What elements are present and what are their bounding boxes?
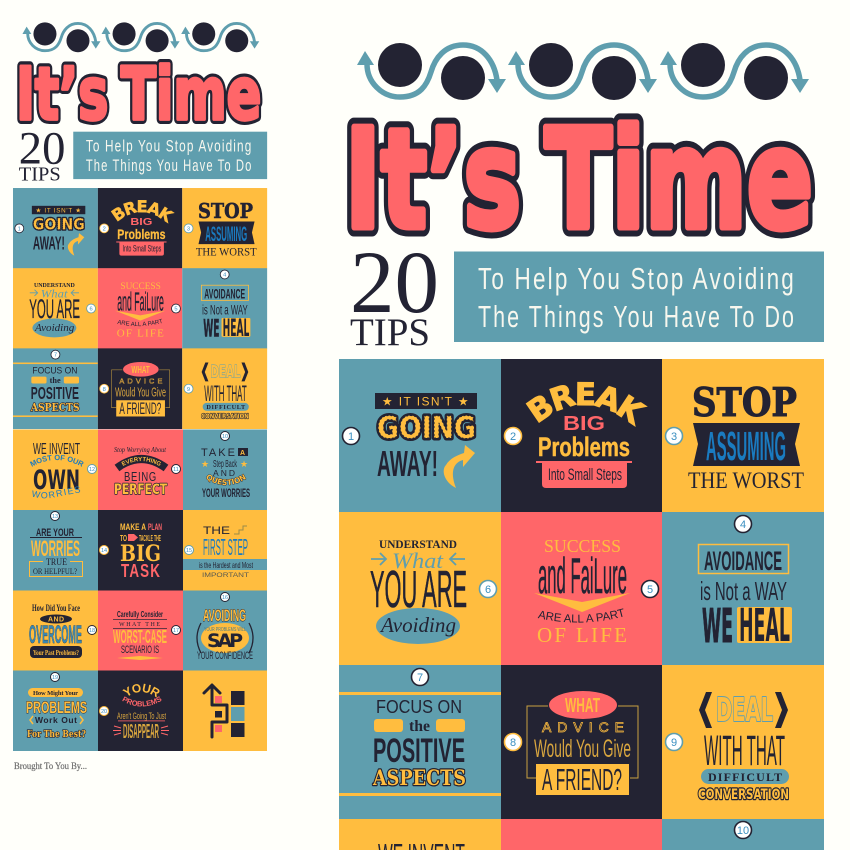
panel: tip 12, cropped <box>339 819 501 850</box>
title: It’s <box>345 101 521 260</box>
panel: tip 20: YOUR <box>122 684 160 698</box>
panel: tip 15 <box>183 510 267 590</box>
panel: tip 15: is the Hardest and Most <box>199 560 253 570</box>
panel: tip 1: GOING <box>377 411 476 446</box>
panel: tip 9: DIFFICULT <box>708 770 782 784</box>
panel: tip 10, cropped: 10 <box>737 825 749 837</box>
panel: tip 9: CONVERSATION <box>698 787 789 803</box>
panel: tip 4: WE <box>203 314 219 342</box>
panel: tip 3 <box>182 188 267 268</box>
panel: tip 6: What <box>41 289 68 301</box>
panel: tip 2: BREAK <box>526 382 648 427</box>
panel: tip 4: 4 <box>740 519 746 531</box>
panel: tip 1 <box>339 359 501 512</box>
panel: tip 4: HEAL <box>223 314 249 342</box>
panel: tip 15: 15 <box>186 548 192 554</box>
panel: tip 17: 17 <box>173 628 179 634</box>
panel: tip 5 <box>98 268 182 348</box>
panel: overview infographic thumbnail <box>13 22 268 772</box>
credit text: Brought To You By... <box>14 761 87 771</box>
panel: tip 8: ADVICE <box>119 376 162 385</box>
panel: tip 9: 9 <box>671 737 677 749</box>
text: FIRST STEP <box>203 534 248 560</box>
panel: tip 7: 7 <box>54 353 57 359</box>
panel: tip 2 <box>501 359 662 512</box>
panel: tip 5: ARE ALL A PART <box>117 318 162 326</box>
panel: tip 4: WE <box>702 599 733 653</box>
panel: tip 16: SAP <box>207 630 243 652</box>
panel: tip 12: WE INVENT <box>33 441 80 458</box>
panel: tip 15: IMPORTANT <box>202 572 249 579</box>
panel: tip 4: 4 <box>223 273 227 279</box>
panel: tip 11: BEING <box>124 469 157 484</box>
panel: tip 16 <box>183 590 267 670</box>
panel: tip 8: WHAT <box>131 365 150 376</box>
title: Time <box>121 52 261 136</box>
panel: tip 3: STOP <box>692 380 797 426</box>
title: It’s <box>345 101 521 260</box>
subtitle banner: The Things You Have To Do <box>86 157 252 175</box>
panel: tip 10: AND <box>213 468 235 478</box>
panel: tip 5: OF LIFE <box>537 623 627 647</box>
panel: tip 1: AWAY! <box>377 443 438 484</box>
panel: tip 6: 6 <box>89 307 93 313</box>
panel: tip 2: Problems <box>538 432 630 462</box>
panel: tip 9 <box>182 348 267 429</box>
panel: tip 8: 8 <box>510 737 516 749</box>
panel: tip 1 <box>13 188 98 268</box>
panel: tip 6: YOU ARE <box>29 293 80 324</box>
panel: tip 10: ★ <box>240 460 248 470</box>
panel: tip 14: PLAN <box>148 522 162 533</box>
subtitle banner: To Help You Stop Avoiding <box>86 137 252 155</box>
panel: tip 6: Avoiding <box>34 322 75 334</box>
panel: tip 11: PERFECT <box>114 482 167 498</box>
panel: tip 12 <box>13 430 98 510</box>
panel: tip 19 <box>13 670 98 751</box>
panel: tip 4 <box>662 512 824 666</box>
panel: tip 20: DISAPPEAR <box>123 721 159 743</box>
heading: 20 tips: TIPS <box>350 311 430 354</box>
panel: tip 7: the <box>409 718 430 735</box>
panel: tip 14 <box>98 510 183 590</box>
panel: tip 3: ASSUMING <box>205 222 247 246</box>
panel: tip 14: 14 <box>101 548 107 554</box>
panel: enlarged detail view <box>339 42 824 850</box>
panel: tip 13: ARE YOUR <box>36 527 74 539</box>
panel: tip 7 <box>13 348 98 429</box>
title: It’s <box>16 52 108 136</box>
panel: tip 1: ★ IT ISN'T ★ <box>36 207 82 214</box>
panel: overview infographic thumbnail: OVERCOME <box>29 621 82 649</box>
panel: tip 14: TO <box>120 534 127 543</box>
panel: tip 1: GOING <box>33 214 85 233</box>
panel: tip 18 <box>13 590 98 670</box>
panel: tip 4: is Not a WAY <box>700 576 787 606</box>
panel: tip 6: YOU ARE <box>370 561 467 619</box>
panel: overview infographic thumbnail: and FaiLure <box>117 287 164 317</box>
panel: tip 6 <box>339 512 501 666</box>
panel: tip 3: STOP <box>198 199 253 223</box>
panel: tip 11: EVERYTHING <box>121 456 161 466</box>
panel: tip 16: AVOIDING <box>203 606 246 625</box>
heading: 20 tips: TIPS <box>19 164 61 186</box>
title <box>345 101 813 260</box>
panel: tip 6: What <box>392 548 444 573</box>
panel: tip 13: OR HELPFUL? <box>33 567 77 576</box>
panel: tip 5 <box>501 512 662 665</box>
panel: tip 5: 5 <box>174 307 178 313</box>
heading: 20 tips: 20 <box>350 234 439 332</box>
panel: tip 10: TAKE <box>201 447 235 459</box>
heading: 20 tips: 20 <box>19 122 65 174</box>
panel: tip 1: GOING <box>377 411 476 446</box>
panel: tip 20 <box>98 670 183 751</box>
panel: tip 10: QUESTION <box>206 474 246 486</box>
panel: tip 13: TRUE <box>46 558 67 568</box>
panel: tip 5: SUCCESS <box>544 536 621 556</box>
panel: tip 16: YOUR CONFIDENCE <box>197 650 253 662</box>
panel: tip 2: Into Small Steps <box>123 243 162 253</box>
title: Time <box>121 52 261 136</box>
panel: tip 19: How Might Your <box>33 690 78 697</box>
panel: tip 8 <box>501 665 662 819</box>
panel: tip 9 <box>662 665 824 819</box>
panel: tip 2: Problems <box>117 226 166 242</box>
panel: tip 9: DEAL <box>211 363 240 383</box>
panel: tip 5: ARE ALL A PART <box>538 608 624 623</box>
panel: tip 10: 10 <box>222 434 228 440</box>
panel: tip 9: 9 <box>187 387 190 393</box>
panel: tip 11: Stop Worrying About <box>114 445 167 454</box>
title: It’s <box>16 52 108 136</box>
panel: tip 6: UNDERSTAND <box>34 283 75 289</box>
panel: tip 6: 6 <box>485 584 491 596</box>
panel: tip 14: MAKE A <box>120 522 146 533</box>
subtitle banner <box>73 132 267 179</box>
panel: tip 6 <box>13 268 98 349</box>
panel: tip 18: How Did You Face <box>32 603 80 613</box>
panel: tip 3: THE WORST <box>196 245 257 259</box>
panel: tip 12: MOST OF OUR <box>30 454 84 467</box>
panel: tip 8: ADVICE <box>542 719 624 735</box>
panel: tip 8: WHAT <box>565 695 600 717</box>
panel: tip 2: 2 <box>510 431 516 443</box>
panel: tip 7: POSITIVE <box>373 732 465 770</box>
panel: tip 11, cropped <box>501 819 662 850</box>
panel: tip 7 <box>339 665 501 819</box>
panel: tip 2 <box>98 188 182 268</box>
panel: tip 18: 18 <box>89 628 95 634</box>
panel: tip 18: Your Past Problems? <box>33 648 79 657</box>
panel: tip 20: Aren't Going To Just <box>117 711 166 721</box>
panel: tip 9: DEAL <box>716 690 773 729</box>
panel: tip 12: OWN <box>33 465 80 496</box>
panel: tip 17 <box>98 590 183 670</box>
panel: tip 2: BIG <box>130 217 152 228</box>
panel: tip 3: 3 <box>671 431 677 443</box>
panel: tip 6: UNDERSTAND <box>379 539 457 551</box>
panel: tip 9: CONVERSATION <box>201 412 249 421</box>
panel: tip 19: For The Best? <box>27 729 86 740</box>
panel: tip 13 <box>13 510 98 590</box>
panel: tip 12: WORRIES <box>32 486 80 498</box>
panel: tip 10: A <box>240 450 245 457</box>
panel: tip 17: SCENARIO IS <box>121 644 159 656</box>
panel: tip 5: SUCCESS <box>120 281 161 291</box>
panel: tip 4: AVOIDANCE <box>204 286 245 302</box>
panel: tip 1: AWAY! <box>33 232 65 253</box>
panel: tip 8: Would You Give <box>534 735 631 763</box>
panel: tip 17: Carefully Consider <box>117 609 163 619</box>
panel: tip 2: Into Small Steps <box>548 465 622 484</box>
panel: tip 17: WHAT THE <box>119 622 160 628</box>
panel: tip 13: WORRIES <box>31 536 80 561</box>
panel: tip 10: Step Back <box>213 459 238 470</box>
panel: tip 15: THE <box>203 525 230 537</box>
panel: tip 14: BIG <box>120 541 161 567</box>
title <box>16 52 261 136</box>
panel: tip 19: 19 <box>52 675 58 681</box>
panel: tip 7: the <box>50 376 61 385</box>
panel: tip 3 <box>662 359 824 512</box>
panel: tip 20: PROBLEMS <box>122 696 162 706</box>
panel: tip 10, cropped <box>662 819 824 850</box>
panel: tip 3: 3 <box>187 226 190 232</box>
panel: tip 7: ASPECTS <box>372 765 466 790</box>
panel: tip 7: FOCUS ON <box>32 365 78 376</box>
panel: tip 18: AND <box>48 616 64 624</box>
panel: tip 11: 11 <box>173 467 179 473</box>
panel: tip 5: 5 <box>647 584 653 596</box>
panel: tip 10: ★ <box>201 460 209 470</box>
panel: tip 1: 1 <box>348 431 354 443</box>
panel: tip 8: A FRIEND? <box>119 400 161 418</box>
panel: tip 5: OF LIFE <box>117 327 164 339</box>
panel: tip 17: WORST-CASE <box>113 627 167 647</box>
panel: tip 19: PROBLEMS <box>26 698 87 717</box>
panel: tip 4: is Not a WAY <box>202 302 248 317</box>
panel: tip 14: TACKLE THE <box>139 534 161 543</box>
panel: tip 6: Avoiding <box>379 613 456 637</box>
panel: tip 13: 13 <box>52 514 58 520</box>
panel: tip 2: BIG <box>563 413 605 435</box>
panel: tip 1: 1 <box>18 226 21 232</box>
panel: tip 2: BREAK <box>110 200 175 224</box>
panel: tip 9: WITH THAT <box>204 381 247 406</box>
subtitle banner <box>454 252 824 342</box>
panel: tip 8 <box>98 348 182 429</box>
panel: tip 4 <box>182 268 267 349</box>
panel: tip 9: DIFFICULT <box>206 404 246 411</box>
panel: tip 12: 12 <box>89 467 95 473</box>
panel: tip 20: 20 <box>101 709 107 715</box>
panel: tip 14: TASK <box>121 561 161 581</box>
panel: tip 7: ASPECTS <box>30 401 80 414</box>
panel: enlarged detail view: and FaiLure <box>538 548 627 604</box>
panel: tip 16: 16 <box>222 595 228 601</box>
panel: tip 10: YOUR WORRIES <box>202 486 250 500</box>
panel: tip 8: Would You Give <box>115 385 166 400</box>
panel: tip 7: 7 <box>417 672 423 684</box>
panel: tip 7: POSITIVE <box>31 383 79 403</box>
panel: tip 16: YOUR PROBLEMS WILL <box>204 627 246 633</box>
icon: circles and arrows motif <box>22 22 259 52</box>
panel: tip 11 <box>98 430 183 510</box>
panel: tip 1: GOING <box>33 214 85 233</box>
panel: tip 8: A FRIEND? <box>542 762 622 797</box>
panel: tip 19: Work Out <box>35 715 77 725</box>
panel: closing icon tile <box>183 670 267 751</box>
panel: tip 2: 2 <box>103 226 106 232</box>
panel: tip 10 <box>183 430 267 510</box>
icon: circles and arrows motif <box>357 43 809 100</box>
panel: tip 1: ★ IT ISN'T ★ <box>382 394 470 408</box>
panel: tip 3: THE WORST <box>688 468 804 493</box>
panel: tip 8: 8 <box>103 387 106 393</box>
panel: tip 7: FOCUS ON <box>376 697 462 717</box>
